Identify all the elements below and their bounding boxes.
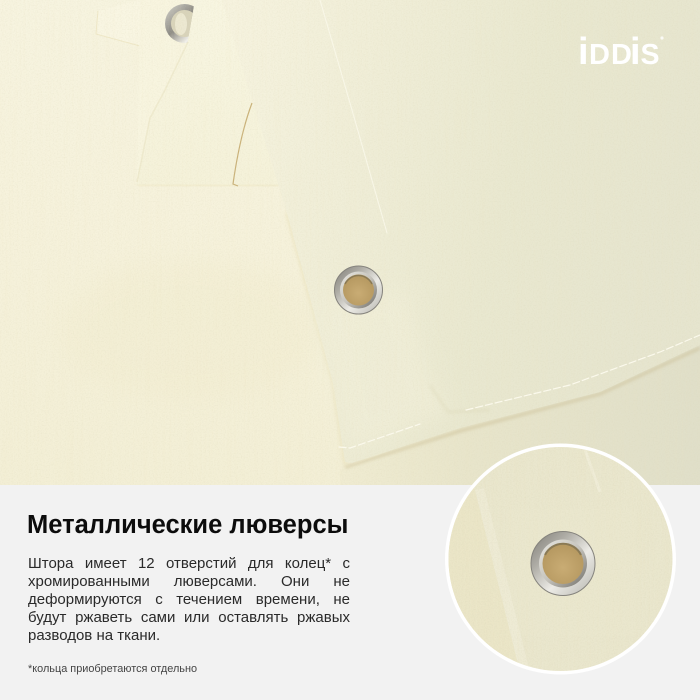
logo: iDDiS: D [589, 39, 610, 71]
logo: iDDiS: S [640, 39, 660, 71]
rear fold tab [96, 0, 140, 46]
description text: деформируются с течением времени, не [28, 591, 350, 608]
detail circle [445, 443, 677, 675]
middle fold of curtain [192, 6, 194, 20]
logo: iDDiS [578, 31, 664, 73]
linen grain texture [0, 0, 700, 485]
lower info panel background [0, 485, 700, 700]
front flap of curtain [278, 0, 700, 463]
yellow mottling [60, 260, 320, 400]
main grommet [334, 266, 382, 314]
fold shadow line [233, 103, 252, 186]
heading: Металлические люверсы [27, 511, 348, 539]
description text: Штора имеет 12 отверстий для колец* с [28, 555, 350, 572]
photo: curtain fabric [0, 0, 700, 485]
flap stitching [320, 0, 700, 448]
description text: разводов на ткани. [28, 627, 160, 644]
fabric beneath flap [400, 345, 700, 485]
soft shadow under front flap [345, 348, 700, 467]
flap soft shading [310, 290, 452, 450]
top grommet [165, 4, 194, 43]
description text [28, 555, 350, 644]
description text: хромированными люверсами. Они не [28, 573, 350, 590]
logo: iDDiS: i [630, 31, 641, 73]
description text: будут ржаветь сами или оставлять ржавых [28, 609, 350, 626]
detail grommet [531, 532, 595, 596]
footnote: *кольца приобретаются отдельно [28, 663, 197, 675]
rear fold of curtain [139, 46, 140, 47]
logo: iDDiS: D [611, 39, 632, 71]
logo: iDDiS: i [578, 31, 589, 73]
